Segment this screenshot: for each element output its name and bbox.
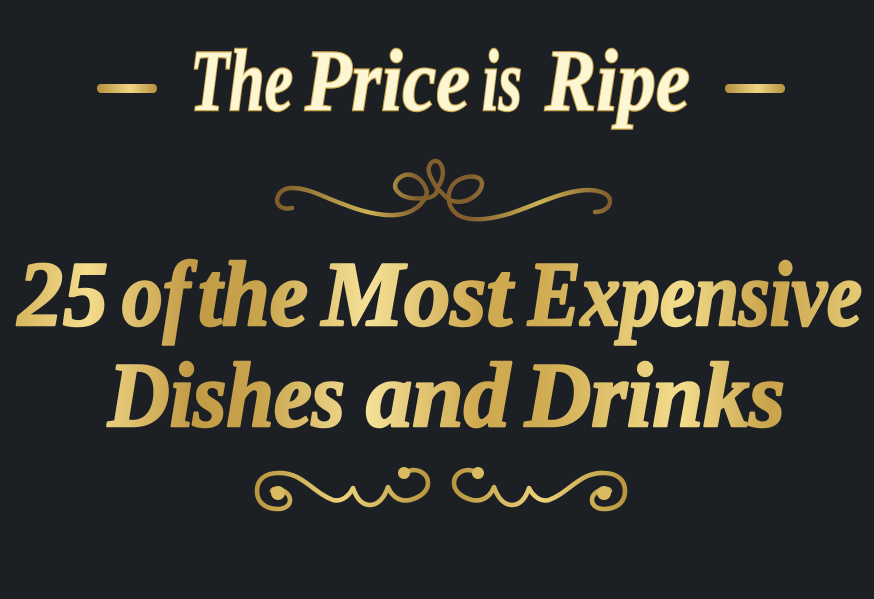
ornament: bottom flourish <box>257 467 625 509</box>
title: 25 of the Most Expensive: the <box>198 243 308 345</box>
right rule <box>725 84 785 93</box>
ornament: top flourish <box>277 161 610 219</box>
title: Dishes and Drinks <box>107 344 785 446</box>
title: 25 of the Most Expensive: Most <box>320 243 514 345</box>
heading: The Price is Ripe: Ripe <box>544 33 690 130</box>
title: 25 of the Most Expensive: of <box>122 243 197 345</box>
heading: The Price is Ripe: Price <box>304 33 470 130</box>
left rule <box>97 84 157 93</box>
heading: The Price is Ripe <box>190 33 690 130</box>
left scroll <box>257 467 428 509</box>
heading: The Price is Ripe: The <box>190 33 293 130</box>
title: 25 of the Most Expensive <box>16 243 862 345</box>
right scroll <box>454 467 625 509</box>
title: Dishes and Drinks: Drinks <box>524 344 785 446</box>
title: 25 of the Most Expensive: 25 <box>16 243 108 345</box>
title: Dishes and Drinks: Dishes <box>107 344 345 446</box>
title: Dishes and Drinks: and <box>366 344 512 446</box>
heading: The Price is Ripe: is <box>482 33 522 130</box>
